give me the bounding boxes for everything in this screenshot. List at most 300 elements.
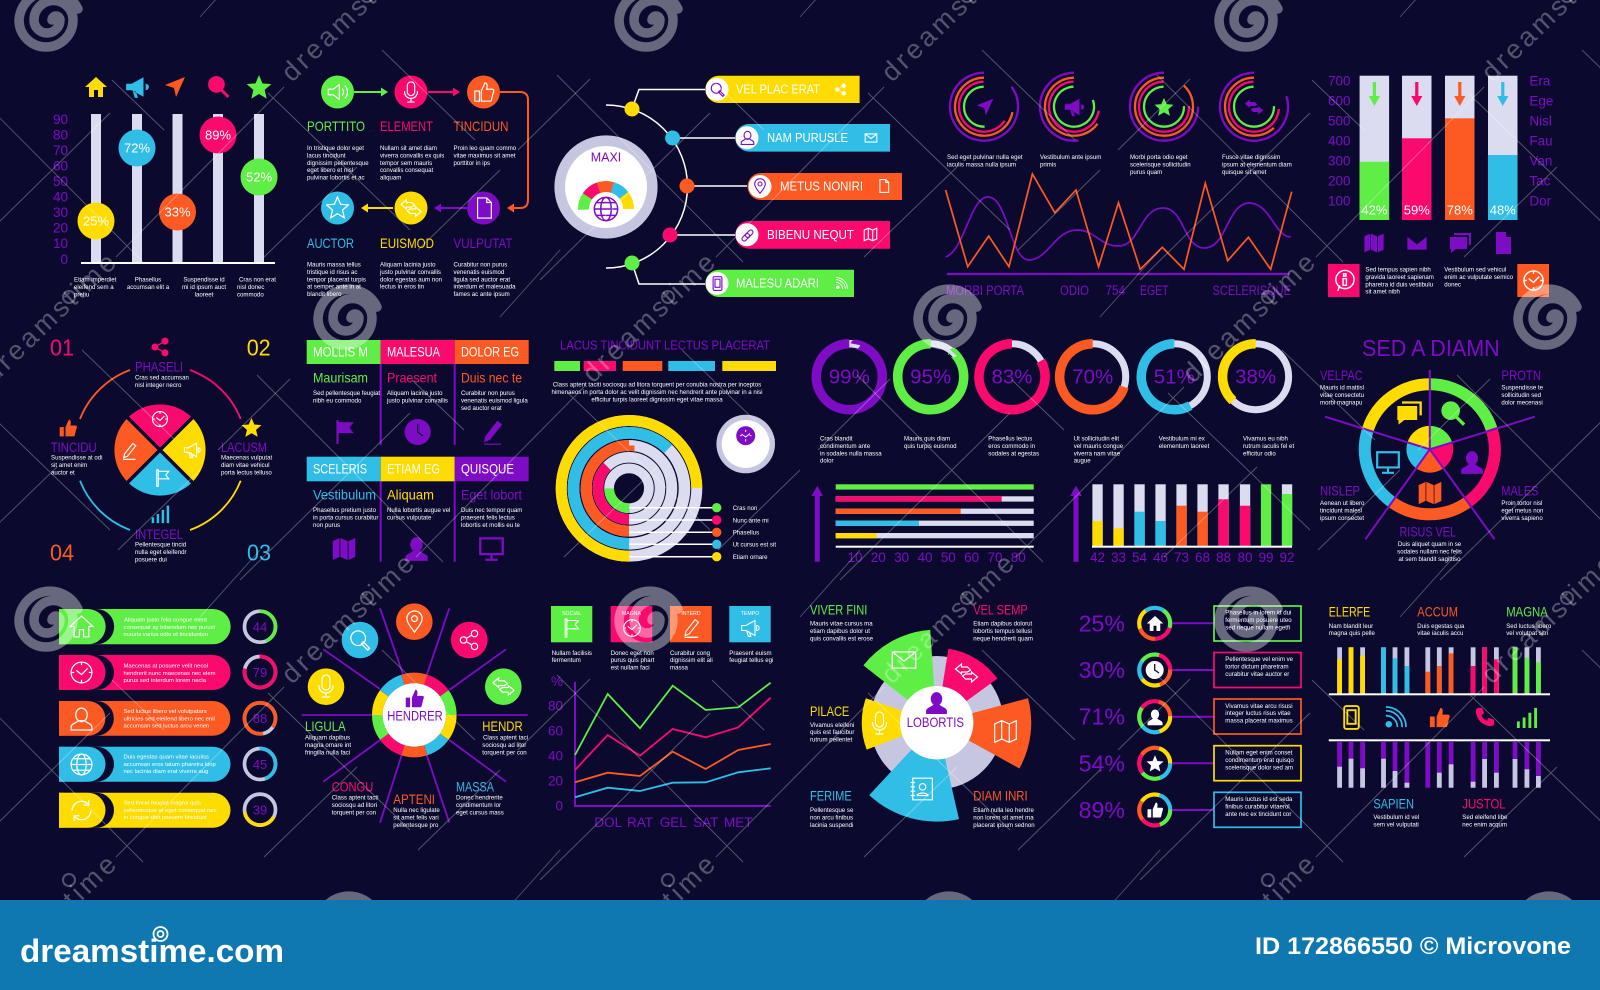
mirrored bar headings xyxy=(1329,604,1552,637)
small donut 45 xyxy=(244,748,276,780)
flow titles and text xyxy=(307,118,517,298)
lobortis centre: LOBORTIS xyxy=(907,714,964,730)
percent row 71%: Vivamus vitae arcu risusi xyxy=(1225,703,1293,710)
pill row 2: purus sed interdum lorem necla xyxy=(124,678,207,684)
table header row 1: DOLOR EG xyxy=(461,344,519,360)
flow titles and text: dignissim pellentesque xyxy=(307,160,369,167)
lobortis base disc xyxy=(870,656,1003,789)
icon row: chart categories xyxy=(85,75,271,99)
horizontal bar chart: 30 xyxy=(894,550,909,565)
radial captions: Sed eget pulvinar nulla eget xyxy=(947,154,1023,161)
radial captions: Morbi porta odio eget xyxy=(1130,154,1188,161)
column 42% xyxy=(1360,76,1389,220)
mirrored bar headings: Sed luctus libero xyxy=(1506,623,1552,630)
pill row 4: nec lacinia diam erat viverra aug xyxy=(124,769,208,775)
lobortis labels: non arcu finibus xyxy=(810,814,853,821)
pill row 2: Maecenas at posuere velit necol xyxy=(124,664,208,670)
slider knob 89% xyxy=(200,116,236,154)
column 78%: 78% xyxy=(1447,202,1473,218)
clock callout xyxy=(1444,264,1549,297)
vertical bar chart: 99 xyxy=(1258,550,1274,565)
panel: slider chart xyxy=(53,75,278,298)
donut captions: Mauris quis diam xyxy=(904,436,950,442)
pill row 2: hendrerit nunc maecenas nec elem xyxy=(124,671,216,677)
lobortis labels xyxy=(810,601,1035,829)
mirrored bar headings: ACCUM xyxy=(1417,604,1458,620)
donut 70% xyxy=(1051,335,1134,418)
wheel labels: viverra sapieno xyxy=(1501,515,1543,522)
lower bars xyxy=(1329,739,1550,788)
wheel labels: eget metus non xyxy=(1501,507,1543,514)
percent row 54%: 54% xyxy=(1079,750,1125,776)
donut captions: augue xyxy=(1074,458,1091,465)
clock callout: Vestibulum sed vehicul xyxy=(1444,266,1506,274)
table row 2 content: Aliquam xyxy=(387,486,434,502)
flow titles and text: pulvinar lobortis et ac xyxy=(307,175,365,182)
column 48% xyxy=(1488,76,1518,220)
percent row 30%: curabitur vitae auctor er xyxy=(1225,671,1289,678)
table row 1 content: nibh eu commodo xyxy=(313,397,362,404)
corner numbers: 03 xyxy=(247,540,271,566)
table row 1 content: Curabitur non purus xyxy=(461,390,515,397)
slider knob 33%: 33% xyxy=(164,204,191,220)
vertical bar chart: 33 xyxy=(1111,550,1126,565)
flow titles and text: lectus in eros tin xyxy=(380,284,424,291)
target legend xyxy=(629,503,776,561)
corner numbers: 02 xyxy=(247,334,271,360)
cycle item: Phaseli: PHASELI xyxy=(135,359,183,375)
cycle item: Integel xyxy=(135,506,186,563)
donut 51%: 51% xyxy=(1154,366,1195,388)
wheel labels: at sem blandit sagittiso xyxy=(1398,556,1461,563)
percent row 30% xyxy=(1079,648,1301,692)
cycle item: Phaseli: Cras sed accumsan xyxy=(135,374,189,382)
column y labels: 400 xyxy=(1328,134,1351,148)
table row 1 content: justo pulvinar convallis xyxy=(386,397,448,404)
lobortis centre xyxy=(900,686,973,759)
pill row 2 xyxy=(59,655,230,690)
panel: Lobortis radial xyxy=(810,601,1035,829)
column y labels: Fau xyxy=(1529,134,1553,148)
small donut 39: 39 xyxy=(253,802,267,817)
lobortis labels: lacinia suspendi xyxy=(810,822,853,829)
flow titles and text: Proin leo quam commo xyxy=(454,145,517,152)
flow titles and text: In tristique dolor eget xyxy=(307,145,364,152)
cycle arcs xyxy=(80,370,241,530)
line chart labels: SCELERISQUE xyxy=(1212,283,1291,298)
vertical bar chart: 80 xyxy=(1237,550,1253,565)
table row 1 content: venenatis euismod ligula xyxy=(461,397,528,404)
column y labels: 200 xyxy=(1328,174,1351,188)
pill row 5: Sed tincid feugiat magna quis xyxy=(124,800,201,806)
mirrored bar footers: SAPIEN xyxy=(1373,795,1414,811)
small donut 88 xyxy=(242,700,278,736)
tile captions: feugiat tellus egi xyxy=(729,657,773,664)
hub labels: sociosqu ad litori xyxy=(332,802,377,809)
hub labels: pellentesque pro xyxy=(393,822,439,829)
column y labels: Van xyxy=(1529,154,1552,168)
mirrored bar headings: MAGNA xyxy=(1506,604,1548,620)
flow step: Euismod xyxy=(394,192,428,224)
flow titles and text: EUISMOD xyxy=(380,235,434,251)
flow titles and text: aliquam xyxy=(380,175,401,182)
mirrored bar footers: sem vel vulputati xyxy=(1373,821,1419,828)
pill: Malesu Adari: MALESU ADARI xyxy=(736,276,819,290)
radial captions: quisque sit amet xyxy=(1222,169,1267,176)
small donut 44: 44 xyxy=(253,620,267,634)
flow titles and text: PORTTITO xyxy=(307,118,365,134)
flow titles and text: porttitor in ips xyxy=(454,160,490,167)
clock callout: donec xyxy=(1444,281,1461,288)
slider captions: Phasellus xyxy=(135,276,161,284)
hub centre xyxy=(383,683,446,747)
y axis labels: 0 xyxy=(60,252,68,267)
clock badge xyxy=(716,415,775,473)
column y labels xyxy=(1328,74,1553,208)
cycle item: Integel: posuere dui xyxy=(135,556,167,563)
pill: Metus Noniri xyxy=(748,173,902,200)
table row 1 content xyxy=(313,370,528,445)
flow titles and text: Nullam sit amet diam xyxy=(380,145,437,152)
percent row 89% xyxy=(1079,780,1301,840)
lobortis labels: lobortis tempus tellusi xyxy=(973,628,1032,635)
line chart axes and labels: GEL xyxy=(660,815,687,830)
wheel labels: ipsum consectet xyxy=(1320,515,1364,522)
cycle item: Tincidu xyxy=(51,420,102,476)
pill: Vel Plac Erat xyxy=(705,76,860,103)
line chart axes and labels: SAT xyxy=(693,815,718,830)
panel: mirrored bars xyxy=(1329,604,1552,828)
radial captions: Fusce vitae dignissim xyxy=(1222,154,1280,161)
slider captions xyxy=(74,276,276,298)
percent row 25%: fermentum posuere uteo xyxy=(1225,617,1292,624)
line chart labels: 754 xyxy=(1106,283,1125,298)
panel: percent rows xyxy=(1079,602,1301,840)
arrow: purple xyxy=(434,204,467,212)
hub labels: LIGULA xyxy=(305,718,346,734)
table row 2 content: Eget lobort xyxy=(461,486,522,502)
line chart labels: ODIO xyxy=(1060,283,1089,298)
donut captions: condimentum ante xyxy=(820,443,871,450)
slider captions: accumsan elit a xyxy=(127,284,170,291)
wheel labels: MALES xyxy=(1501,482,1538,498)
lobortis labels: quis est faucibur xyxy=(810,729,854,736)
table row 1 content: Aliquam lacinia justo xyxy=(387,390,443,397)
panel: pill list xyxy=(59,609,281,831)
hub labels: Class aptent tacti xyxy=(332,794,378,802)
radial captions: ipsum at elementum diam xyxy=(1222,161,1292,168)
line chart axes and labels: % xyxy=(551,674,563,689)
radial captions xyxy=(947,154,1292,176)
flow titles and text: Curabitur non purus xyxy=(454,262,507,268)
wheel labels: sollicitudin sed xyxy=(1501,392,1541,399)
donut captions: Vivamus eu nibh xyxy=(1243,436,1288,442)
line chart axes and labels: MET xyxy=(724,815,753,830)
panel: tiles and multi-line chart xyxy=(548,606,773,830)
lobortis labels: neque hendrerit quam xyxy=(973,635,1033,642)
hub labels: Class aptent taci xyxy=(483,734,528,742)
pill row 1 xyxy=(59,609,231,644)
cycle item: Phaseli xyxy=(135,338,189,389)
pill: Metus Noniri: METUS NONIRI xyxy=(780,178,863,194)
hub circle MAXI: MAXI xyxy=(591,150,621,164)
hub labels: sociosqu ad litor xyxy=(482,742,526,749)
cycle item: Tincidu: auctor et xyxy=(51,469,75,476)
wheel labels: Suspendisse te xyxy=(1501,384,1544,392)
target description: Class aptent taciti sociosqu ad litora torquent per conubia nostra per inceptos xyxy=(553,382,761,388)
tile captions: est nullam faci xyxy=(611,665,650,672)
hub labels: torquent per con xyxy=(482,749,527,756)
wheel labels: dolor mecenasi xyxy=(1501,399,1543,406)
lobortis labels: VIVER FINI xyxy=(810,601,867,617)
y axis labels: 50 xyxy=(53,174,68,189)
flow titles and text: TINCIDUN xyxy=(454,118,508,134)
radial mini 4 xyxy=(1211,64,1297,150)
donut captions: rutrum iaculis fel et xyxy=(1243,443,1294,450)
percent row 71% xyxy=(1079,689,1301,744)
lobortis labels: FERIME xyxy=(810,788,852,804)
donut 95% xyxy=(884,330,977,423)
horizontal bar chart: 60 xyxy=(964,550,979,565)
percent row 71%: integer luctus risus vitae xyxy=(1225,710,1291,717)
small donut 79: 79 xyxy=(253,665,267,680)
footer banner xyxy=(0,900,1600,990)
cycle item: Integel: nulla eget eleifendr xyxy=(135,549,186,556)
vertical bar chart: 88 xyxy=(1216,550,1231,565)
donut 70%: 70% xyxy=(1072,366,1113,388)
slider captions: Etiam imperdiet xyxy=(74,276,117,284)
cycle item: Tincidu: TINCIDU xyxy=(51,439,97,455)
flow titles and text: dolor egestas aum non xyxy=(380,276,442,283)
y axis labels: 30 xyxy=(53,205,68,220)
column y labels: Ege xyxy=(1529,94,1553,108)
cycle item: Lacusm: Maecenas vulputat xyxy=(221,454,272,462)
table header row 1: MOLLIS M xyxy=(313,344,368,360)
column y labels: Tac xyxy=(1529,174,1551,188)
y axis labels xyxy=(53,112,68,267)
wheel labels: sodales nullam nec felis xyxy=(1397,548,1462,555)
info callout xyxy=(1328,264,1434,297)
tile: Interd xyxy=(670,606,712,642)
hub labels: APTENI xyxy=(393,791,435,807)
tile captions: fermentum xyxy=(552,657,581,664)
upper bars xyxy=(1329,647,1550,695)
column 78% xyxy=(1445,76,1474,220)
vertical bar chart: 54 xyxy=(1132,550,1147,565)
slider knob 52%: 52% xyxy=(246,170,272,184)
lobortis labels: etiam dapibus dolor ut xyxy=(810,628,870,635)
panel: hub with pills xyxy=(554,76,902,297)
panel: Hendrer hub xyxy=(302,603,528,829)
pill: Bibenu Nequt: BIBENU NEQUT xyxy=(767,227,854,242)
pill row 5: pellentesque at eget consequat nec xyxy=(124,808,217,814)
wheel labels: Duis aliquet quam in se xyxy=(1398,541,1462,548)
cycle pie xyxy=(114,404,206,496)
hub segmented ring xyxy=(363,663,466,767)
table header row 2: QUISQUE xyxy=(461,460,514,476)
cycle item: Integel: INTEGEL xyxy=(135,526,183,542)
donut captions: in sodales nulla massa xyxy=(820,450,882,457)
wheel labels: Aenean ut libero xyxy=(1320,500,1365,507)
donut 99% xyxy=(811,338,888,415)
vertical bar chart: 42 xyxy=(1090,550,1105,565)
wheel centre pie xyxy=(1406,426,1453,473)
cycle item: Integel: Pellentesque tincid xyxy=(135,542,186,548)
slider captions: Suspendisse id xyxy=(183,276,225,284)
watermark wordmarks: dreamstime xyxy=(275,548,420,689)
wheel title: SED A DIAMN xyxy=(1362,335,1500,361)
slider captions: pretiu xyxy=(74,291,89,298)
slider captions: nisl donec xyxy=(237,284,264,291)
watermark wordmarks: dreamstime xyxy=(576,849,721,990)
percent row 54%: Nullam eget enim conset xyxy=(1225,750,1293,756)
slider captions: commodo xyxy=(237,291,264,298)
percent row 54% xyxy=(1079,733,1301,794)
pill row 4: accumsan eros tatum pharetra kinp xyxy=(124,762,217,768)
info callout: sit amet nibh xyxy=(1365,289,1400,296)
lobortis labels: PILACE xyxy=(810,703,849,719)
donut 83% xyxy=(967,332,1057,422)
wheel icons xyxy=(1377,401,1483,505)
column y labels: 700 xyxy=(1328,74,1351,88)
percent row 30%: 30% xyxy=(1079,657,1125,683)
wheel labels: NISLEP xyxy=(1320,482,1360,498)
horizontal bar chart: 80 xyxy=(1011,550,1026,565)
donut captions: quis turpis euismod xyxy=(904,443,956,450)
small donut 45: 45 xyxy=(253,757,267,772)
tile captions: purus quis phart xyxy=(611,657,655,664)
hub icon circles xyxy=(308,603,522,705)
radial captions: iaculis massa nulla ipsum xyxy=(947,161,1016,168)
hub labels: fringilla nulla faci xyxy=(305,749,350,756)
table row 1 content: Praesent xyxy=(387,370,437,386)
table header row 2 xyxy=(307,457,529,481)
lobortis labels: quis convallis est erose xyxy=(810,635,874,642)
line chart axes and labels: 20 xyxy=(548,774,563,788)
wheel labels: Mauris id mattisl xyxy=(1320,384,1364,392)
line chart: wave and zigzag xyxy=(946,174,1292,274)
donut captions: Phasellus lectus xyxy=(988,436,1032,442)
line chart axes and labels: 40 xyxy=(548,748,563,764)
info callout: gravida laoreet sapienam xyxy=(1365,274,1434,281)
column y labels: Nisl xyxy=(1529,114,1552,128)
flow step: Vulputat xyxy=(467,192,500,224)
hub labels: Nulla nec ligulate xyxy=(393,807,440,814)
horizontal bar chart: 10 xyxy=(847,550,863,565)
column 59%: 59% xyxy=(1404,202,1430,218)
wheel labels: morbi magnapu xyxy=(1320,399,1362,406)
arrow: pink xyxy=(428,88,460,96)
flow titles and text: AUCTOR xyxy=(307,235,354,251)
hub labels: eget cursus mass xyxy=(456,809,504,816)
panel: column gauges xyxy=(1328,74,1553,297)
flow titles and text: at semper ante in at xyxy=(307,284,361,291)
percent row 54%: scelerisque dolor sed am xyxy=(1225,764,1293,771)
slider captions: laoreet xyxy=(195,291,214,298)
radial mini 3 xyxy=(1123,66,1205,148)
radial mini 1 xyxy=(937,59,1031,154)
vertical bar chart: 73 xyxy=(1174,550,1189,565)
table header row 2: SCELERIS xyxy=(313,460,367,476)
hub labels: sit amet felis vari xyxy=(393,814,439,821)
tile captions: Praesent euism xyxy=(729,650,772,657)
flow titles and text: VULPUTAT xyxy=(454,235,513,251)
flow titles and text: tempor sem mauris xyxy=(380,160,432,167)
info callout: Sed tempus sapien nibh xyxy=(1365,266,1431,274)
clock callout: enim ac vulputate semico xyxy=(1444,274,1514,281)
table row 2 content: Phasellus pretium justo xyxy=(313,507,377,514)
flow titles and text: tempor placerat turpis xyxy=(307,276,366,283)
footer logo text: dreamstime.com xyxy=(20,933,284,969)
corner numbers xyxy=(50,334,271,566)
slider knob 52% xyxy=(240,158,278,196)
pill: Nam Purusle xyxy=(735,124,890,152)
target colour legend chips xyxy=(554,361,776,371)
mirrored bar footers: JUSTOL xyxy=(1462,795,1506,811)
pill row 3: accumsan sed luctus arcu venen xyxy=(124,724,209,730)
line chart labels: EGET xyxy=(1140,283,1168,298)
lobortis labels: Vivamus eleifeni xyxy=(810,722,854,729)
percent row 30%: tortor dictum pharetram xyxy=(1225,664,1289,671)
panel: process flow xyxy=(307,76,528,298)
radial mini 2 xyxy=(1033,66,1115,147)
tile captions xyxy=(552,650,773,672)
mirrored bar footers xyxy=(1373,795,1508,828)
target legend: Nunc ante mi xyxy=(733,517,769,524)
donut 38% xyxy=(1209,330,1302,423)
hub labels xyxy=(305,718,528,829)
connector nodes xyxy=(624,102,694,270)
cycle item: Tincidu: Suspendisse at odi xyxy=(51,454,102,462)
pill: Nam Purusle: NAM PURUSLE xyxy=(767,130,848,145)
slider tracks xyxy=(91,114,264,263)
hub labels: Aliquam dapibus xyxy=(305,734,350,742)
lobortis wedge icons xyxy=(872,652,1016,800)
column 42%: 42% xyxy=(1361,202,1388,218)
slider knob 72% xyxy=(118,130,156,166)
panel: radial minis and line chart xyxy=(937,59,1297,298)
flow titles and text: justo pulvinar convallis xyxy=(379,269,441,276)
pill row 1: Aliquam justo felis congue elent xyxy=(124,618,207,624)
tile captions: dignissim elit ali xyxy=(670,657,713,664)
column icons xyxy=(1364,232,1511,254)
panel: segmented wheel xyxy=(1320,335,1544,563)
hub labels: condimentum lor xyxy=(456,802,501,809)
percent row 89%: ante nec ex tincidunt cor xyxy=(1225,811,1291,818)
horizontal bar chart: 40 xyxy=(917,550,933,565)
radial captions: primis xyxy=(1040,161,1056,168)
horizontal bar chart: 70 xyxy=(987,550,1003,565)
target title: LACUS TINCIDUNT LECTUS PLACERAT xyxy=(560,337,770,352)
table row 2 content: Nulla lobortis augue vel xyxy=(387,507,450,514)
flow titles and text: viverra convallis ex quis xyxy=(380,152,444,159)
panel: feature table xyxy=(307,340,529,562)
wheel labels xyxy=(1320,367,1544,563)
watermark wordmarks: dreamstime xyxy=(1176,849,1321,990)
percent row 71%: massa placerat maximus xyxy=(1225,718,1293,725)
table header row 1 xyxy=(307,340,529,364)
target legend: Ut cursus est sit xyxy=(733,542,776,549)
table row 2 content xyxy=(313,486,522,561)
tile captions: massa xyxy=(670,665,689,672)
small donut 44 xyxy=(244,611,276,642)
footer credit: ID 172866550 © Microvone xyxy=(1255,933,1571,960)
donut 51% xyxy=(1129,332,1219,422)
pill row 1: consequat ay bibendum nec purust xyxy=(124,625,216,631)
pill: Bibenu Nequt xyxy=(735,221,890,249)
y axis labels: 60 xyxy=(53,158,68,174)
mirrored bar headings: Duis egestas qua xyxy=(1417,623,1465,630)
